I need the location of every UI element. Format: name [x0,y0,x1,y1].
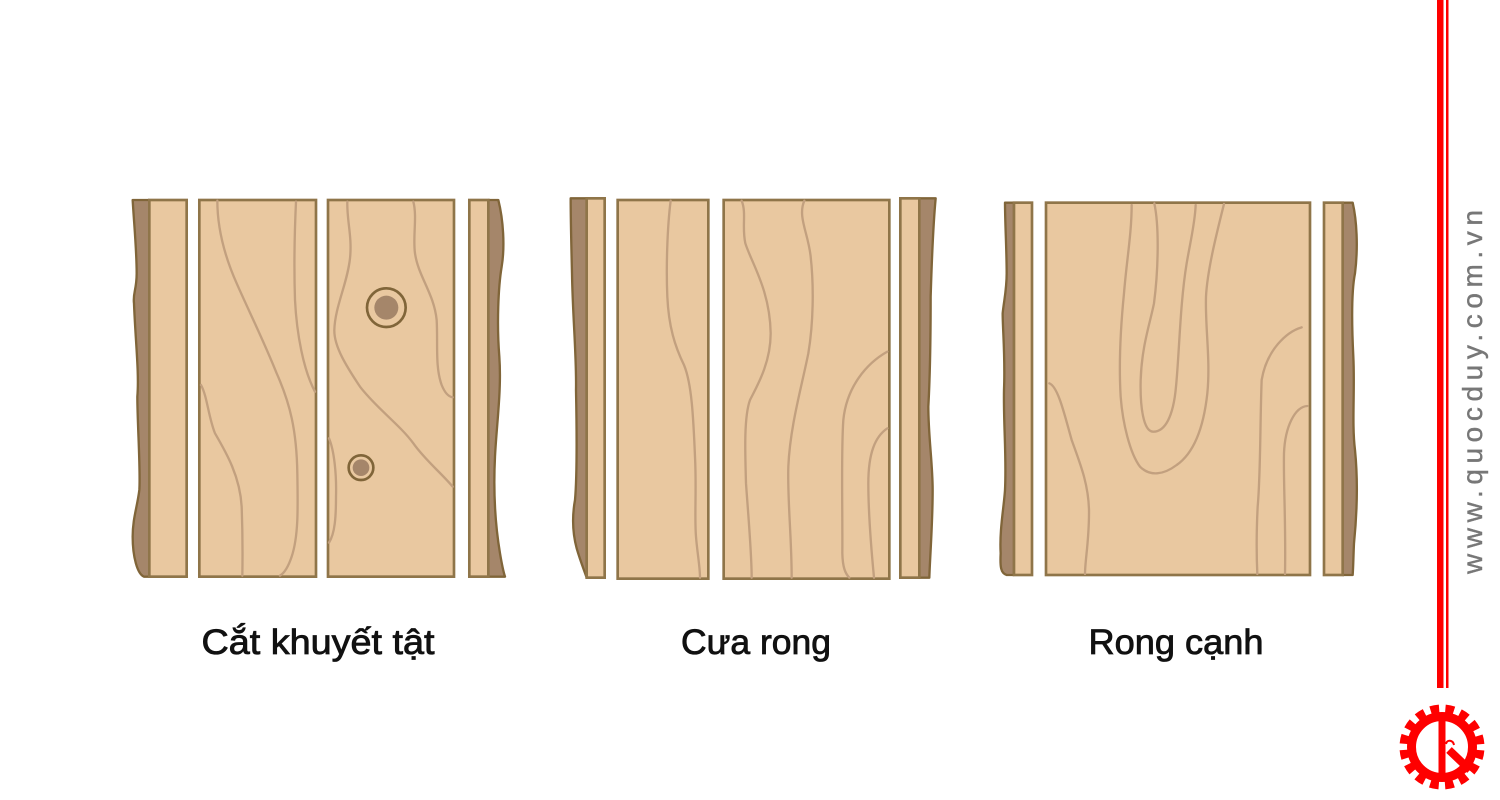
plank 1 with grain [199,200,316,577]
icon: small knot [349,455,373,480]
plank 1 with grain [618,200,708,579]
left slab with bark [1000,203,1032,575]
plank 2 with grain and knots [328,200,454,577]
panel: edging boards [1000,203,1357,575]
icon: large knot [367,288,406,327]
panel: defect cutting boards [133,200,505,577]
caption: Cắt khuyết tật: Cắt khuyết tật [202,623,435,662]
plank 2 with grain [724,200,889,579]
right slab with bark [900,198,936,578]
red vertical double rule [1437,0,1448,688]
left slab with bark [133,200,187,577]
right slab with bark [1324,203,1357,575]
right slab with bark [469,200,505,577]
panel: ripping boards [571,198,936,579]
vertical website text: www.quocduy.com.vn [1457,210,1488,575]
caption: Cưa rong: Cưa rong [681,623,831,662]
left slab with bark [571,198,605,578]
plank with grain [1046,203,1310,575]
icon: red gear logo [1404,709,1480,785]
caption: Rong cạnh: Rong cạnh [1088,623,1264,662]
